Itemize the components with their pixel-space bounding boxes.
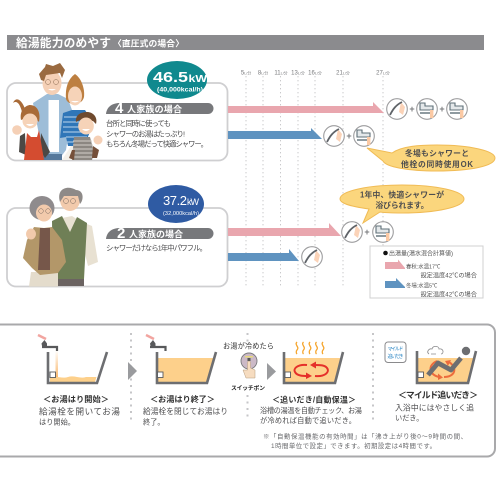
icons: shower plus tap winter: [324, 126, 374, 146]
step: start filling: ＜お湯はり開始＞: [43, 394, 109, 404]
teal capacity badge: 46.5: [153, 69, 188, 86]
teal capacity badge: (40,000kcal/h): [157, 86, 203, 94]
blue capacity badge: [148, 185, 204, 223]
icons: shower plus tap winter: +: [346, 131, 352, 141]
switch: press when water cools: お湯が冷めたら: [223, 342, 274, 350]
flow rate grid: 11L/分: [274, 70, 288, 76]
step: reheating and auto keep warm: ＜追いだき/自動保温＞: [272, 394, 356, 404]
callout: year round shower: [340, 185, 464, 223]
illustration: family: [12, 63, 103, 160]
blue capacity badge: kW: [187, 197, 200, 207]
arrow: step one to two: [128, 362, 137, 380]
step: start filling: 給湯栓を開いてお湯: [39, 406, 120, 416]
panel: four person family: [7, 61, 228, 160]
icons: couple shower plus tap: +: [364, 227, 370, 237]
flow rate grid: 27L/分: [376, 70, 390, 76]
panel: two person household: [7, 185, 228, 286]
heading bar: 〈直圧式の場合〉: [113, 38, 184, 48]
step: finish filling: 給湯栓を閉じてお湯はり: [143, 406, 228, 416]
step: reheating and auto keep warm: 浴槽の湯温を自動チェック、お湯: [260, 406, 362, 415]
family description: [106, 119, 208, 148]
teal capacity badge: [147, 61, 207, 99]
step: reheating and auto keep warm: [260, 342, 362, 425]
legend: 設定温度42℃の場合: [420, 290, 478, 298]
icon: mild badge: 追いだき: [388, 353, 404, 360]
step: reheating and auto keep warm: が冷めれば自動で追いだき。: [260, 416, 356, 425]
illustration: couple: [23, 188, 98, 286]
household label: 2: [117, 225, 125, 242]
callout: winter simultaneous use: 冬場もシャワーと: [405, 148, 469, 158]
panel: bath functions: [0, 324, 495, 456]
blue capacity badge: 37.2: [163, 193, 187, 208]
step: mild reheating: [385, 342, 478, 422]
callout: winter simultaneous use: [367, 145, 495, 171]
step: start filling: はり開始。: [39, 418, 75, 426]
step: mild reheating: いだき。: [395, 414, 423, 422]
icons: shower plus two taps: +: [439, 104, 445, 114]
legend: 冬場:水温5℃: [406, 282, 438, 290]
legend: 出湯量(湯水混合計算値): [389, 249, 453, 257]
legend: 設定温度42℃の場合: [420, 272, 478, 280]
step: start filling: [38, 335, 120, 426]
household label: [106, 225, 214, 242]
flow rate grid: 16L/分: [308, 70, 322, 76]
step: mild reheating: ＜マイルド追いだき＞: [398, 389, 478, 400]
flow rate grid: 8L/分: [258, 70, 268, 76]
footnote: [263, 432, 467, 450]
heading bar: [7, 35, 484, 50]
step: finish filling: 終了。: [143, 418, 165, 426]
icon: mild badge: [385, 342, 406, 362]
icon: mild badge: マイルド: [388, 346, 404, 352]
icons: shower plus two taps: +: [409, 104, 415, 114]
teal capacity badge: kW: [188, 73, 207, 85]
family label: 4: [115, 100, 124, 117]
bar: couple spring: [228, 223, 341, 236]
icons: couple shower plus tap: [342, 222, 393, 242]
legend: [370, 246, 483, 298]
bar: couple winter: [228, 249, 299, 261]
callout: winter simultaneous use: 他栓の同時使用OK: [401, 159, 473, 169]
bar: family winter: [228, 128, 322, 139]
step: finish filling: ＜お湯はり終了＞: [150, 394, 215, 404]
bar: family spring: [228, 102, 384, 113]
footnote: 1時間単位で設定」できます。初期設定は4時間です。: [271, 441, 436, 450]
family label: 人家族の場合: [127, 103, 182, 114]
household description: シャワーだけなら1年中パワフル。: [106, 244, 207, 252]
family description: シャワーのお湯はたっぷり!: [106, 130, 185, 138]
heading bar: 給湯能力のめやす: [16, 36, 111, 50]
blue capacity badge: (32,000kcal/h): [163, 211, 199, 217]
flow rate grid: [241, 70, 390, 288]
footnote: ※「自動保温機能の有効時間」は「沸き上がり後0〜9時間の間、: [263, 432, 467, 440]
family label: [106, 100, 214, 117]
flow rate grid: 13L/分: [291, 70, 305, 76]
icons: shower plus two taps: [387, 99, 467, 119]
step: finish filling: [143, 335, 228, 426]
callout: year round shower: 浴びられます。: [376, 200, 428, 210]
family description: 台所と同時に使っても: [106, 119, 171, 128]
switch: press when water cools: [223, 342, 274, 392]
switch: press when water cools: スイッチポン: [231, 384, 265, 392]
household label: 人家族の場合: [129, 228, 183, 239]
step: mild reheating: 入浴中にはやさしく追: [395, 402, 474, 412]
legend: 春秋:水温17℃: [406, 262, 441, 270]
flow rate grid: 5L/分: [241, 70, 251, 76]
flow rate grid: 21L/分: [336, 70, 350, 76]
callout: year round shower: 1年中、快適シャワーが: [360, 190, 444, 200]
arrow: switch to reheating: [267, 363, 276, 380]
family description: もちろん冬場だって快適シャワー。: [106, 140, 208, 148]
icon: couple shower winter: [302, 247, 322, 267]
